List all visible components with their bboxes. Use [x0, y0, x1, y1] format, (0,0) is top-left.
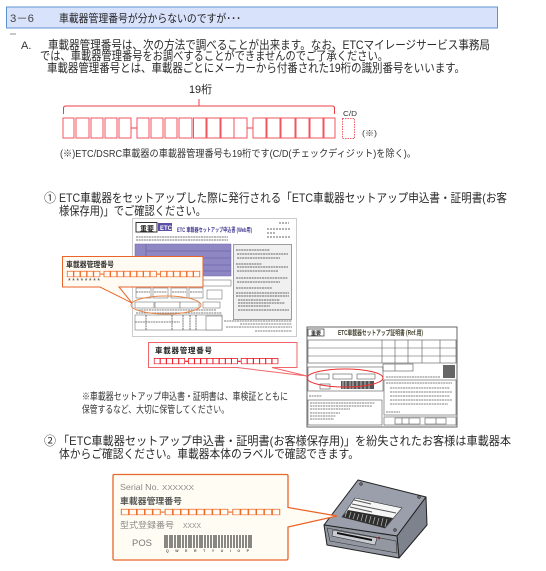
callout: orange number label: □□□□□-□□□□□□□□-□□□□□□ — [67, 269, 200, 280]
callout: orange number label: ******** — [68, 278, 100, 285]
callout: device label enlargement: XXXX — [183, 523, 201, 530]
right instruction panel — [234, 244, 292, 320]
text block: answer: A. — [21, 40, 31, 52]
form rows — [135, 280, 231, 330]
device slot — [327, 528, 397, 553]
form header: ETC — [160, 226, 173, 232]
document: application form — [132, 218, 296, 336]
label: 19 digits: 19桁 — [189, 82, 212, 96]
callout: device label enlargement: Serial No. — [120, 482, 159, 492]
caption: note on DSRC: (※)ETC/DSRC車載器の車載器管理番号も19桁です(C/D(チェックディジット)を除く)。 — [60, 147, 416, 160]
decorative marker — [10, 33, 16, 35]
step 2 text: ② — [44, 434, 56, 448]
step 2 text — [44, 433, 511, 461]
callout: red number label: □□□□□-□□□□□□□□-□□□□□□ — [154, 356, 278, 367]
callout: red number label: 車載器管理番号 — [155, 345, 212, 355]
text block: answer: では、車載器管理番号をお調べすることができませんのでご了承ください。 — [40, 48, 388, 63]
callout: device label enlargement: 型式登録番号 — [120, 520, 175, 530]
ellipse highlight on certificate — [307, 369, 383, 387]
note: keep documents safe — [82, 390, 288, 416]
ellipse highlight on form — [131, 296, 201, 314]
illustration: device unit — [324, 480, 427, 558]
step 1 text: 様保存用)」でご確認ください。 — [59, 203, 206, 218]
text block: answer — [21, 37, 490, 75]
note: keep documents safe: 保管するなど、大切に保管してください。 — [82, 403, 229, 416]
heading: question bar: 車載器管理番号が分からないのですが･･･ — [59, 11, 241, 25]
form header: ETC 車載器セットアップ申込書 (Web用) — [177, 226, 252, 234]
step 2 text: 体からご確認ください。車載器本体のラベルで確認できます。 — [59, 446, 359, 461]
device side — [397, 497, 427, 558]
heading: question bar: 3－6 — [10, 13, 34, 25]
callout: red number label — [148, 342, 307, 376]
callout: orange number label: 車載器管理番号 — [66, 259, 114, 269]
note mark: (※) — [362, 129, 377, 138]
barcode — [165, 535, 251, 548]
document: setup certificate — [307, 327, 457, 427]
callout: device label enlargement: QWERTYUIOP — [166, 549, 250, 553]
text block: answer: 車載器管理番号とは、車載器ごとにメーカーから付番された19桁の識別番号をいいます。 — [47, 60, 465, 75]
device screws — [360, 482, 420, 532]
document: setup certificate: ETC車載器セットアップ証明書 (Ref.用) — [338, 328, 423, 337]
device label — [342, 498, 402, 528]
digit boxes — [63, 118, 335, 138]
form header: 重要 — [140, 224, 154, 233]
form header — [136, 222, 290, 237]
device top — [324, 480, 426, 536]
device LED — [378, 537, 380, 539]
certificate barcode — [341, 381, 374, 389]
bracket — [64, 99, 334, 114]
callout: device label enlargement: POS — [132, 538, 152, 548]
step 2 text: 「ETC車載器セットアップ申込書・証明書(お客様保存用)」を紛失されたお客様は車載器本 — [58, 433, 511, 448]
device front — [324, 525, 399, 558]
callout: orange number label — [62, 256, 203, 303]
note: keep documents safe: ※車載器セットアップ申込書・証明書は、車検証とともに — [82, 390, 288, 403]
callout: device label enlargement: 車載器管理番号 — [120, 496, 183, 506]
text block: answer: 車載器管理番号は、次の方法で調べることが出来ます。なお、ETCマイレージサービス事務局 — [48, 37, 490, 52]
callout: device label enlargement — [113, 474, 337, 560]
QR code — [443, 365, 455, 378]
callout: device label enlargement: XXXXXX — [162, 483, 194, 492]
document: setup certificate: 重要 — [311, 330, 321, 337]
diagram: 19-digit number — [63, 82, 377, 138]
callout: device label enlargement: □□□□□-□□□□□□□□-□□□□□□ — [121, 507, 280, 518]
check digit box — [342, 109, 358, 138]
step 1 text: ① — [44, 191, 56, 205]
heading: question bar — [6, 7, 498, 28]
step 1 text — [44, 191, 507, 218]
check digit box: C/D — [343, 109, 358, 118]
purple block — [135, 244, 231, 276]
